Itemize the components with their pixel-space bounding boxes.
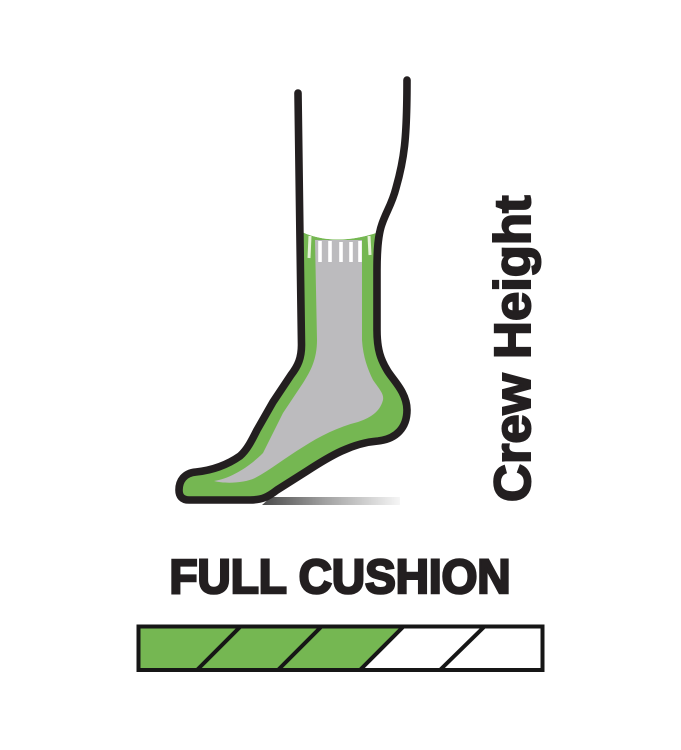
bar frame bbox=[138, 626, 542, 670]
leg and foot outline bbox=[179, 80, 407, 500]
sock green cushion bbox=[179, 232, 407, 500]
segment dividers bbox=[197, 626, 485, 670]
heading: Full Cushion: FULL CUSHION bbox=[170, 551, 510, 604]
side label: Crew Height: Crew Height bbox=[484, 195, 541, 502]
sock illustration bbox=[179, 80, 407, 500]
filled level bbox=[138, 626, 403, 670]
cuff ribs bbox=[320, 241, 360, 262]
sock gray inner bbox=[214, 240, 383, 483]
white cuff edge bbox=[296, 222, 384, 240]
cuff ribs on cushion bbox=[309, 236, 370, 258]
ground shadow bbox=[262, 497, 400, 505]
cushion level bar bbox=[138, 626, 542, 670]
